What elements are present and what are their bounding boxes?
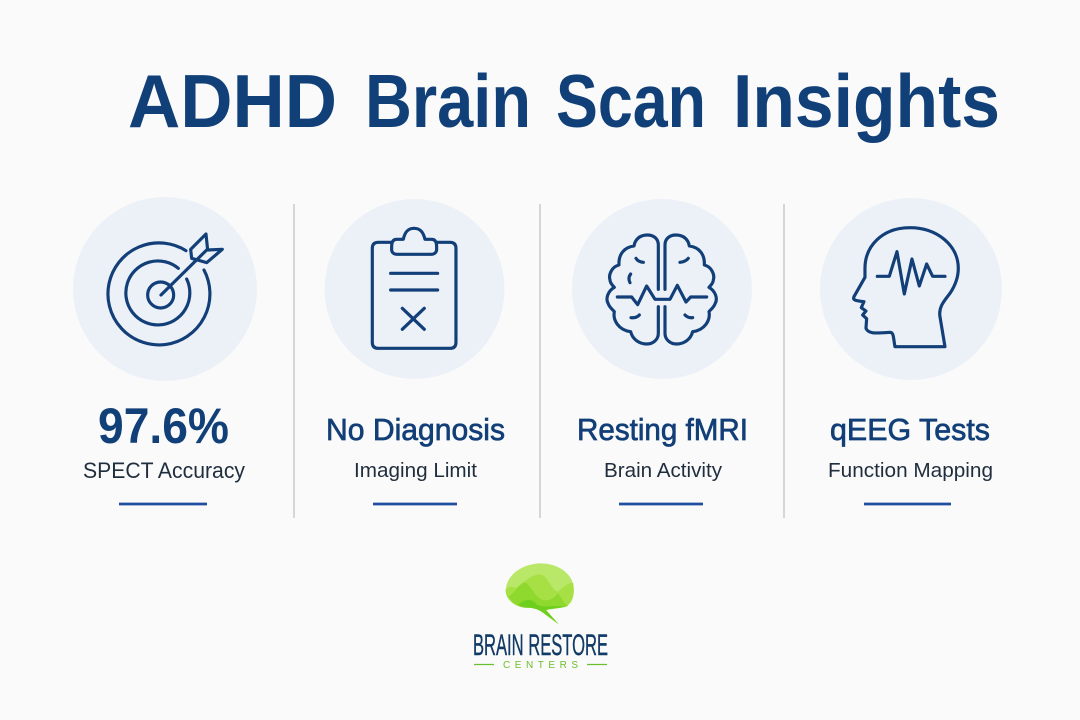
panel: no diagnosis <box>324 199 505 504</box>
title: Scan <box>556 59 706 143</box>
panel: SPECT accuracy <box>73 197 257 504</box>
stat: 97.6%: 97.6% <box>98 398 229 454</box>
heading: qEEG Tests: qEEG Tests <box>830 412 990 447</box>
icon: clipboard with cross <box>372 228 456 348</box>
icon: brain with signal <box>607 235 716 344</box>
title: ADHD <box>128 59 337 143</box>
title <box>128 59 1000 143</box>
panel: qEEG tests <box>820 198 1002 504</box>
tagline: CENTERS <box>503 660 578 671</box>
heading: No Diagnosis: No Diagnosis <box>326 412 505 447</box>
panel: resting fMRI <box>572 199 752 504</box>
icon: green brain <box>506 563 574 624</box>
label: Function Mapping: Function Mapping <box>828 460 993 482</box>
title: Insights <box>733 59 1000 143</box>
logo: Brain Restore Centers <box>473 563 608 671</box>
icon: head with brainwave <box>854 228 958 347</box>
label: Brain Activity: Brain Activity <box>604 460 722 482</box>
heading: Resting fMRI: Resting fMRI <box>577 412 748 447</box>
wordmark: BRAIN RESTORE <box>473 629 608 662</box>
icon: target with arrow <box>108 234 222 345</box>
title: Brain <box>365 59 531 143</box>
label: Imaging Limit: Imaging Limit <box>354 460 477 482</box>
label: SPECT Accuracy: SPECT Accuracy <box>83 458 245 483</box>
